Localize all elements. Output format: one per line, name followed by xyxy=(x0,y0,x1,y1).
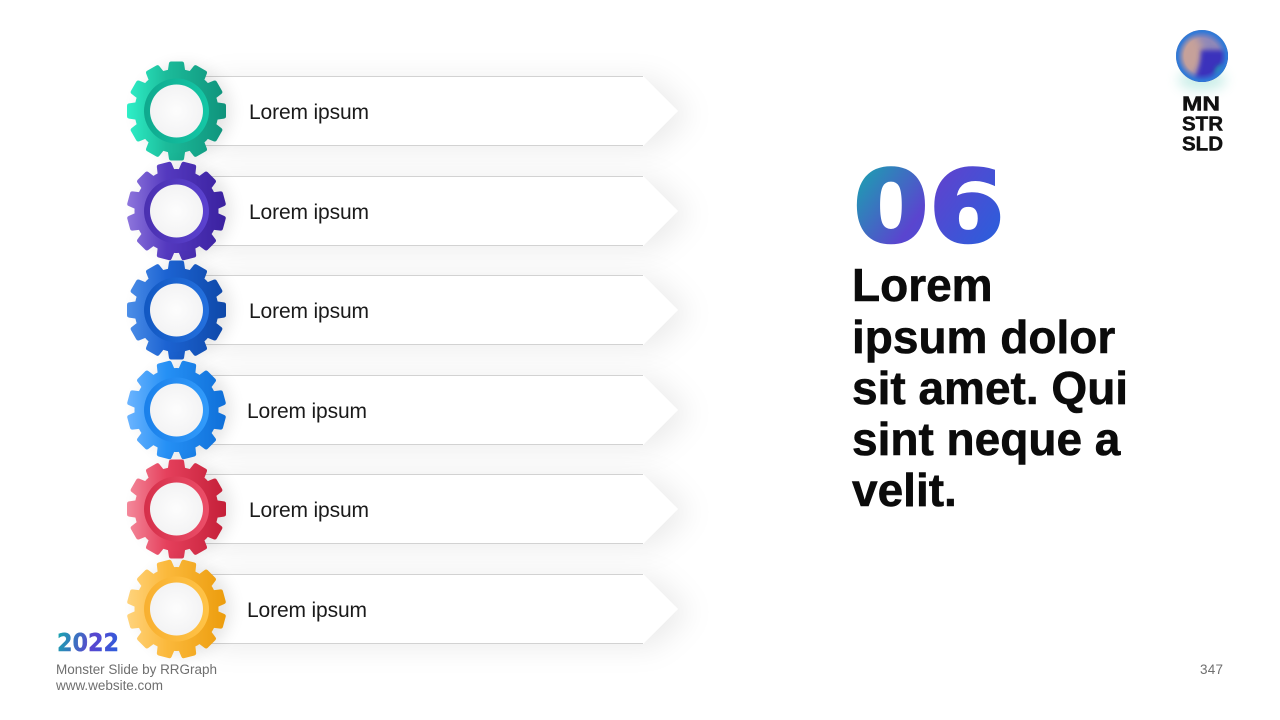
icon: purple gear xyxy=(126,161,230,261)
heading text block: Lorem xyxy=(852,259,993,311)
panel: arrow bar 5 xyxy=(200,474,678,544)
logo text xyxy=(1182,94,1224,156)
label: item 3: Lorem ipsum xyxy=(249,300,369,323)
panel: arrow bar 1 xyxy=(200,76,678,146)
icon: teal gear xyxy=(126,61,230,161)
icon: yellow gear xyxy=(126,559,230,659)
big number 06: 06 xyxy=(853,149,1005,265)
heading text block: velit. xyxy=(852,464,957,516)
footer credit: Monster Slide by RRGraph xyxy=(56,662,217,677)
heading text block: sint neque a xyxy=(852,413,1121,465)
icon: logo sphere xyxy=(1176,30,1232,91)
logo text: STR xyxy=(1182,114,1224,136)
label: item 2: Lorem ipsum xyxy=(249,201,369,224)
label: item 6: Lorem ipsum xyxy=(247,599,367,622)
icon: light blue gear xyxy=(126,360,230,460)
icon: red gear xyxy=(126,459,230,559)
year 2022: 2022 xyxy=(57,628,119,657)
heading text block: sit amet. Qui xyxy=(852,362,1128,414)
panel: arrow bar 2 xyxy=(200,176,678,246)
panel: arrow bar 4 xyxy=(200,375,678,445)
panel: arrow bar 3 xyxy=(200,275,678,345)
footer credit xyxy=(55,662,217,693)
logo text: MN xyxy=(1182,94,1220,116)
label: item 4: Lorem ipsum xyxy=(247,400,367,423)
panel: arrow bar 6 xyxy=(200,574,678,644)
icon: dark blue gear xyxy=(126,260,230,360)
heading text block: ipsum dolor xyxy=(852,311,1115,363)
logo text: SLD xyxy=(1182,134,1223,156)
footer credit: www.website.com xyxy=(55,678,163,693)
heading text block xyxy=(852,259,1128,516)
label: item 1: Lorem ipsum xyxy=(249,101,369,124)
page number: 347 xyxy=(1200,662,1223,677)
label: item 5: Lorem ipsum xyxy=(249,499,369,522)
